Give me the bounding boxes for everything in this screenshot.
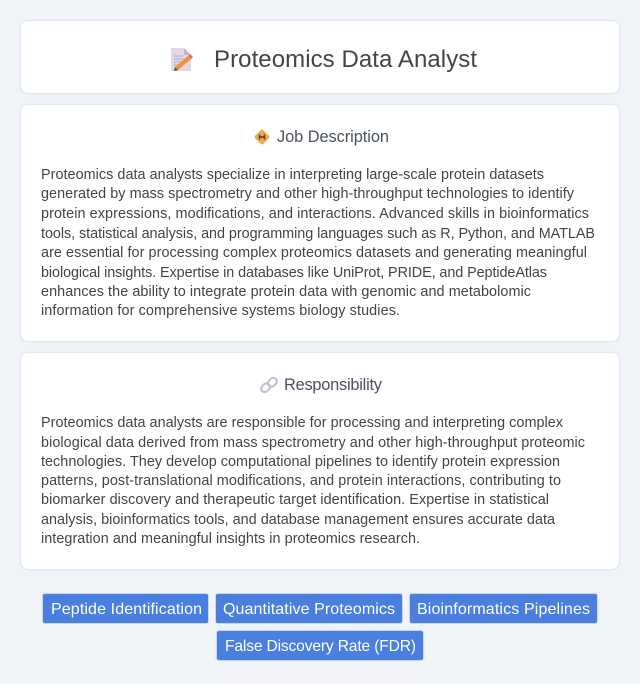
icon: document with pencil: [171, 48, 193, 71]
heading: responsibility: Responsibility: [284, 376, 383, 394]
tag: false discovery rate: False Discovery Rate (FDR): [225, 638, 416, 655]
text block: responsibility: biological data derived from mass spectrometry and other high-throughput proteomic: [41, 435, 585, 451]
panel: job description: [20, 104, 620, 342]
text block: responsibility: Proteomics data analysts are responsible for processing and interpreting complex: [41, 415, 564, 431]
text block: job description: are essential for processing complex proteomics datasets and generating meaningful: [41, 245, 587, 261]
tag: peptide identification: Peptide Identification: [51, 601, 202, 618]
tag: quantitative proteomics: [215, 593, 403, 624]
panel: responsibility: [20, 352, 620, 570]
tag: peptide identification: [42, 593, 209, 624]
text block: job description: protein expressions, modifications, and interactions. Advanced skills in bioinformatics: [41, 206, 589, 222]
text block: responsibility: patterns, post-translational modifications, and protein interactions, contributing to: [41, 473, 561, 489]
text block: responsibility: analysis, bioinformatics tools, and database management ensures accurate data: [41, 512, 555, 528]
text block: responsibility: integration and meaningful insights in proteomics research.: [41, 531, 420, 547]
text block: job description: tools, statistical analysis, and programming languages such as R, Python, and MATLAB: [41, 226, 595, 242]
heading: job description: Job Description: [277, 128, 389, 146]
text block: responsibility: technologies. They develop computational pipelines to identify protein expression: [41, 454, 560, 470]
tag: bioinformatics pipelines: [409, 593, 598, 624]
text block: job description: information for comprehensive systems biology studies.: [41, 303, 400, 319]
text block: job description: generated by mass spectrometry and other high-throughput technologies to identify: [41, 186, 575, 202]
text block: job description: Proteomics data analysts specialize in interpreting large-scale protein datasets: [41, 167, 544, 183]
text block: job description: biological insights. Expertise in databases like UniProt, PRIDE, and PeptideAtlas: [41, 265, 547, 281]
text block: responsibility: [41, 415, 585, 547]
tag: bioinformatics pipelines: Bioinformatics Pipelines: [417, 601, 590, 618]
tag: quantitative proteomics: Quantitative Proteomics: [223, 601, 395, 618]
title: Proteomics Data Analyst: [214, 46, 477, 73]
text block: job description: enhances the ability to integrate protein data with genomic and metabolomic: [41, 284, 531, 300]
text block: job description: [41, 167, 595, 319]
icon: orange diamond sign: [254, 130, 270, 144]
tag: false discovery rate: [216, 630, 424, 661]
text block: responsibility: biomarker discovery and therapeutic target identification. Expertise in statistical: [41, 492, 549, 508]
panel: header: [20, 20, 620, 94]
icon: chain link: [260, 376, 278, 394]
